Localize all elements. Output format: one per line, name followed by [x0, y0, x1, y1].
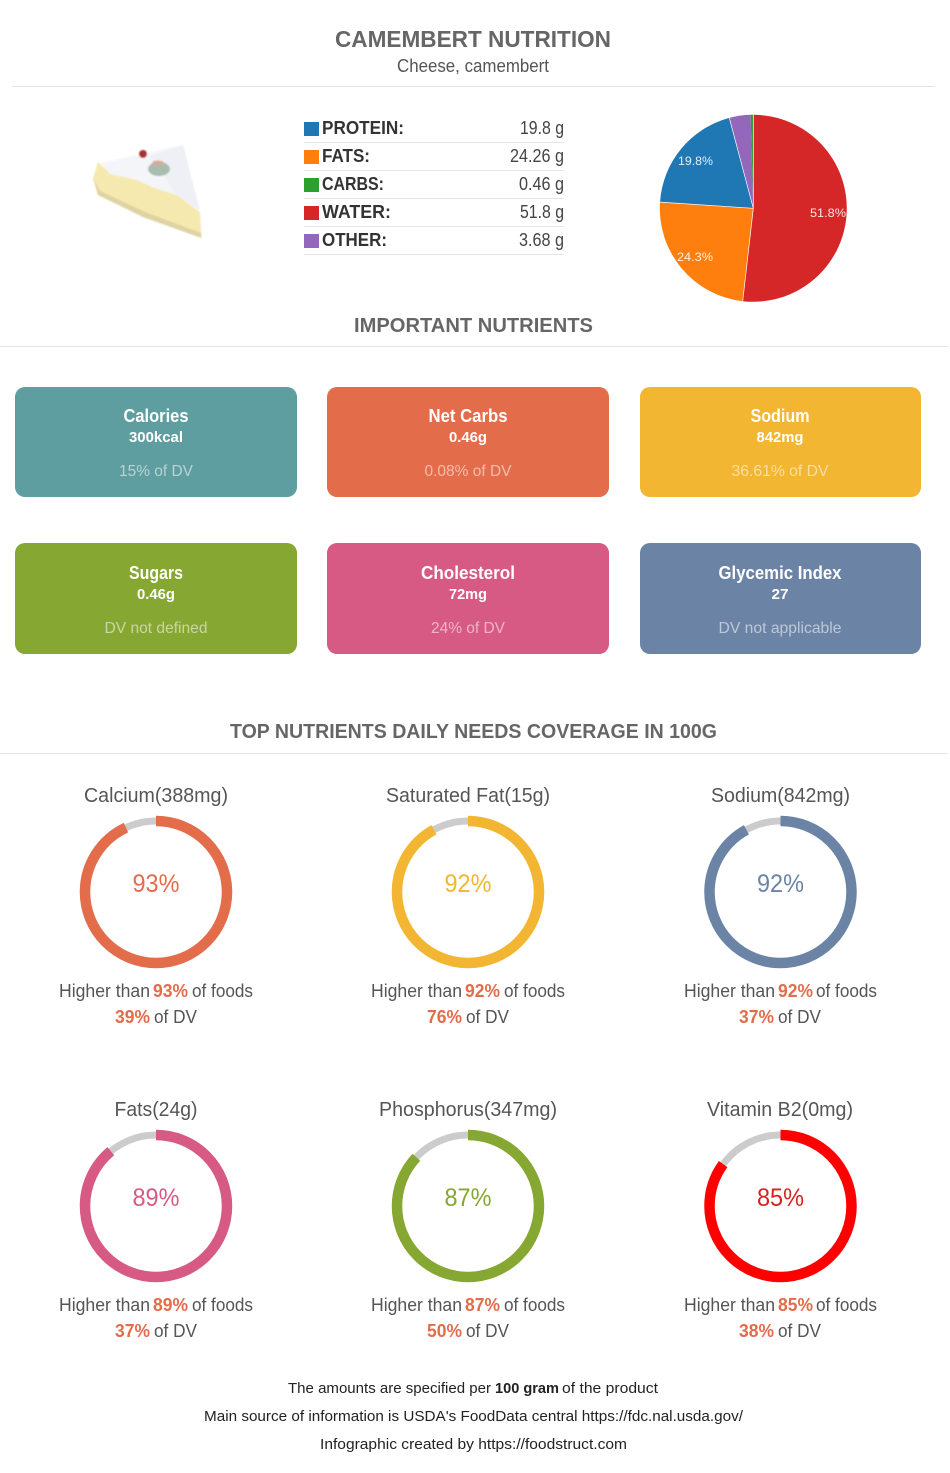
gauge: vitamin b2: 85%	[778, 1295, 813, 1315]
gauge: sodium: Higher than	[684, 981, 775, 1001]
card: calories: Calories	[124, 406, 188, 426]
row: carbs: CARBS:	[322, 174, 384, 194]
pie chart	[660, 115, 847, 302]
pie chart: 24.3%	[677, 250, 713, 264]
gauge: fats: 89%	[153, 1295, 188, 1315]
gauge: fats	[59, 1099, 253, 1341]
gauge: saturated fat: 92%	[444, 870, 492, 898]
gauge: vitamin b2: of foods	[816, 1295, 877, 1315]
card: cholesterol: 72mg	[449, 586, 487, 603]
row: protein: 19.8 g	[520, 118, 564, 138]
card: calories: 300kcal	[129, 429, 183, 446]
gauge: vitamin b2: 85%	[757, 1184, 804, 1212]
card: cholesterol: Cholesterol	[421, 563, 515, 583]
footer notes: Infographic created by https://foodstruct.com	[320, 1436, 627, 1453]
row: water: 51.8 g	[520, 202, 564, 222]
gauge: saturated fat: Saturated Fat(15g)	[386, 785, 550, 807]
gauge: saturated fat: Higher than	[371, 981, 462, 1001]
card: sugars	[15, 543, 297, 654]
card: net carbs: 0.46g	[449, 429, 487, 446]
gauge: fats: of DV	[154, 1321, 197, 1341]
gauge: phosphorus: of foods	[504, 1295, 565, 1315]
card: glycemic index: 27	[772, 586, 788, 603]
row: protein	[304, 118, 564, 142]
heading: important nutrients: IMPORTANT NUTRIENTS	[354, 315, 593, 337]
pie chart: 19.8%	[678, 154, 713, 168]
row: fats: FATS:	[322, 146, 370, 166]
row: fats	[304, 146, 564, 170]
gauge: fats: of foods	[192, 1295, 253, 1315]
heading: top nutrients: TOP NUTRIENTS DAILY NEEDS COVERAGE IN 100G	[230, 721, 717, 743]
gauge: saturated fat: 76%	[427, 1007, 462, 1027]
row: other: OTHER:	[322, 230, 387, 250]
row: other	[304, 230, 564, 254]
card: sodium: 36.61% of DV	[732, 463, 829, 480]
card: cholesterol: 24% of DV	[431, 620, 505, 637]
gauge: calcium: 93%	[153, 981, 188, 1001]
subtitle: Cheese, camembert	[397, 56, 549, 76]
gauge: sodium: of foods	[816, 981, 877, 1001]
gauge: phosphorus: Higher than	[371, 1295, 462, 1315]
row: carbs: 0.46 g	[519, 174, 564, 194]
card: sugars: 0.46g	[137, 586, 175, 603]
gauge: fats: Higher than	[59, 1295, 150, 1315]
gauge: phosphorus	[371, 1099, 565, 1341]
gauge: calcium: 39%	[115, 1007, 150, 1027]
gauge: phosphorus: 50%	[427, 1321, 462, 1341]
card: net carbs: 0.08% of DV	[424, 463, 512, 480]
gauge: sodium: 92%	[757, 870, 804, 898]
footer notes: of the product	[562, 1380, 659, 1397]
footer notes: 100 gram	[495, 1380, 559, 1397]
card: sugars: Sugars	[129, 563, 183, 583]
card: calories	[15, 387, 297, 497]
gauge: saturated fat: of foods	[504, 981, 565, 1001]
gauge: calcium: of foods	[192, 981, 253, 1001]
gauge: sodium: 37%	[739, 1007, 774, 1027]
gauge: vitamin b2: of DV	[778, 1321, 821, 1341]
gauge: sodium: 92%	[778, 981, 813, 1001]
card: net carbs	[327, 387, 609, 497]
row: carbs	[304, 174, 564, 198]
gauge: calcium: of DV	[154, 1007, 197, 1027]
nutrient composition table	[304, 118, 564, 254]
card: glycemic index: DV not applicable	[718, 620, 842, 637]
gauge: saturated fat: 92%	[465, 981, 500, 1001]
footer notes: Main source of information is USDA's FoodData central https://fdc.nal.usda.gov/	[204, 1408, 744, 1425]
gauge: phosphorus: of DV	[466, 1321, 509, 1341]
card: glycemic index: Glycemic Index	[718, 563, 842, 583]
gauge: calcium: 93%	[132, 870, 180, 898]
gauge: calcium: Calcium(388mg)	[84, 785, 228, 807]
gauge: calcium	[59, 785, 253, 1027]
card: sodium: 842mg	[756, 429, 804, 446]
gauge: sodium	[684, 785, 877, 1027]
card: cholesterol	[327, 543, 609, 654]
row: fats: 24.26 g	[510, 146, 564, 166]
gauge: saturated fat	[371, 785, 565, 1027]
icon: camembert cheese wedge	[93, 145, 202, 238]
gauge: phosphorus: 87%	[465, 1295, 500, 1315]
gauge: fats: Fats(24g)	[114, 1099, 198, 1121]
gauge: fats: 89%	[132, 1184, 180, 1212]
card: calories: 15% of DV	[119, 463, 193, 480]
row: protein: PROTEIN:	[322, 118, 404, 138]
gauge: calcium: Higher than	[59, 981, 150, 1001]
card: sodium	[640, 387, 921, 497]
card: sugars: DV not defined	[104, 620, 208, 637]
row: water	[304, 202, 564, 226]
gauge: vitamin b2	[684, 1099, 877, 1341]
gauge: sodium: Sodium(842mg)	[711, 785, 850, 807]
footer notes	[204, 1380, 744, 1453]
gauge: sodium: of DV	[778, 1007, 821, 1027]
gauge: vitamin b2: Higher than	[684, 1295, 775, 1315]
title: CAMEMBERT NUTRITION	[335, 26, 611, 52]
footer notes: The amounts are specified per	[288, 1380, 491, 1397]
gauge: vitamin b2: 38%	[739, 1321, 774, 1341]
gauge: vitamin b2: Vitamin B2(0mg)	[707, 1099, 853, 1121]
gauge: phosphorus: Phosphorus(347mg)	[379, 1099, 557, 1121]
card: net carbs: Net Carbs	[428, 406, 508, 426]
gauge: fats: 37%	[115, 1321, 150, 1341]
pie chart: 51.8%	[810, 206, 846, 220]
card: glycemic index	[640, 543, 921, 654]
row: other: 3.68 g	[519, 230, 564, 250]
gauge: saturated fat: of DV	[466, 1007, 509, 1027]
row: water: WATER:	[322, 202, 391, 222]
gauge: phosphorus: 87%	[444, 1184, 492, 1212]
card: sodium: Sodium	[750, 406, 810, 426]
